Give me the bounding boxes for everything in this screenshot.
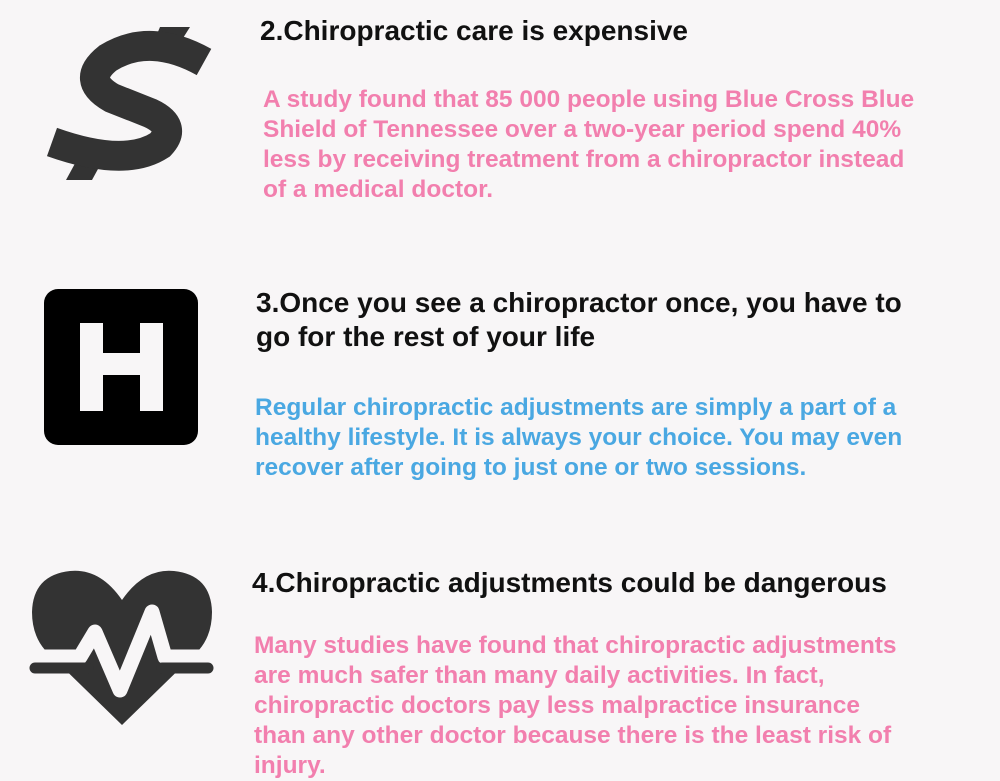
text: section 3 body: healthy lifestyle. It is always your choice. You may even: [255, 424, 902, 451]
heading: section 3: 3.Once you see a chiropractor once, you have to: [256, 287, 902, 318]
text: section 4 body: than any other doctor because there is the least risk of: [254, 722, 891, 749]
icon: heart with pulse: [30, 570, 214, 725]
text: section 4 body: [254, 632, 897, 779]
heading: section 2: 2.Chiropractic care is expensive: [260, 15, 688, 46]
text: section 4 body: injury.: [254, 752, 326, 779]
heading: section 3: go for the rest of your life: [256, 321, 595, 352]
text: section 4 body: Many studies have found that chiropractic adjustments: [254, 632, 897, 659]
icon: dollar sign: [47, 27, 212, 180]
text: section 3 body: recover after going to just one or two sessions.: [255, 454, 806, 481]
heading: section 4: 4.Chiropractic adjustments could be dangerous: [252, 567, 887, 598]
text: section 4 body: chiropractic doctors pay less malpractice insurance: [254, 692, 860, 719]
text: section 4 body: are much safer than many daily activities. In fact,: [254, 662, 825, 689]
text: section 3 body: [255, 394, 902, 481]
text: section 2 body: less by receiving treatment from a chiropractor instead: [263, 146, 904, 173]
text: section 3 body: Regular chiropractic adjustments are simply a part of a: [255, 394, 896, 421]
text: section 2 body: A study found that 85 000 people using Blue Cross Blue: [263, 86, 914, 113]
text: section 2 body: [263, 86, 914, 203]
text: section 2 body: of a medical doctor.: [263, 176, 493, 203]
heading: section 3: [256, 287, 902, 352]
icon: hospital H: [44, 289, 198, 445]
text: section 2 body: Shield of Tennessee over a two-year period spend 40%: [263, 116, 901, 143]
